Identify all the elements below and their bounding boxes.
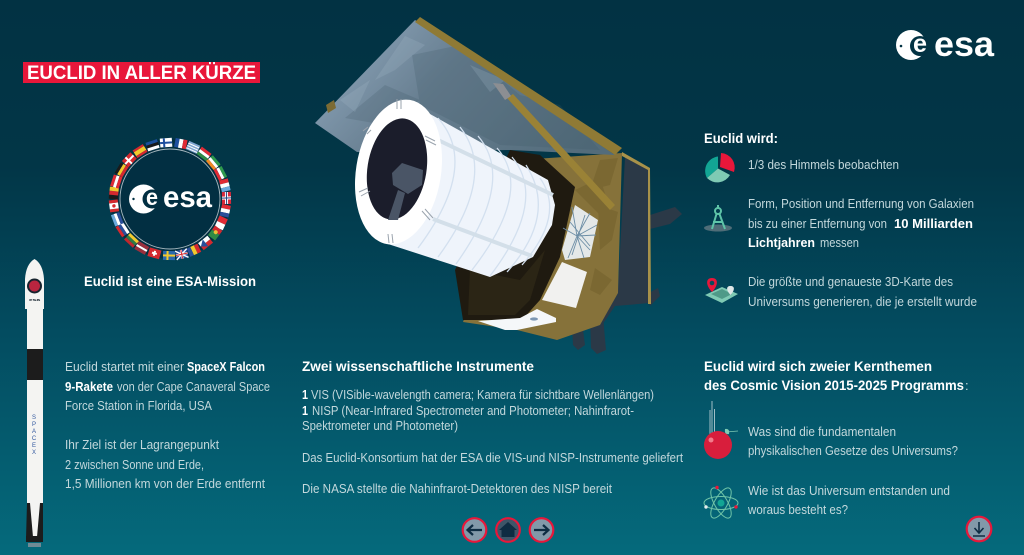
sky goal text: 1/3 des Himmels beobachten (748, 158, 899, 172)
instruments text block: NISP (Near-Infrared Spectrometer and Photometer; Nahinfrarot- (312, 404, 634, 418)
instruments text block: Das Euclid-Konsortium hat der ESA die VIS-und NISP-Instrumente geliefert (302, 451, 683, 465)
core themes heading (704, 358, 969, 393)
rocket: esa (29, 297, 41, 302)
launch text block: Ihr Ziel ist der Lagrangepunkt (65, 438, 219, 452)
rocket mission patch (27, 278, 42, 294)
icon: atom (704, 485, 738, 521)
badge esa logo: esa (163, 181, 212, 214)
rocket (25, 259, 44, 547)
esa flag ring badge (109, 138, 231, 260)
launch text block: SpaceX Falcon (187, 360, 265, 374)
launch text block: von der Cape Canaveral Space (117, 380, 270, 394)
badge esa logo: e (146, 184, 158, 210)
launch text block: 2 zwischen Sonne und Erde, (65, 458, 204, 472)
badge caption: Euclid ist eine ESA-Mission (84, 273, 256, 289)
rocket spacex label: A (32, 429, 36, 435)
button: back arrow (463, 518, 486, 542)
satellite dark side panel (590, 157, 650, 325)
distance goal text: Form, Position und Entfernung von Galaxien (748, 197, 974, 211)
icon: falling apple (704, 401, 738, 459)
instruments text block: 1 (302, 404, 308, 418)
core themes heading: : (965, 378, 969, 393)
core themes heading: Euclid wird sich zweier Kernthemen (704, 358, 932, 374)
distance goal text: 10 Milliarden (894, 217, 973, 231)
distance goal text: Lichtjahren (748, 236, 815, 250)
rocket spacex label: S (32, 415, 36, 421)
telescope aperture (345, 93, 452, 251)
icon: 3D map with pins (705, 278, 738, 303)
title: EUCLID IN ALLER KÜRZE (27, 63, 256, 84)
rocket spacex label: X (32, 450, 36, 456)
instruments text block: Zwei wissenschaftliche Instrumente (302, 358, 534, 374)
esa logo top right (896, 25, 995, 64)
button: forward arrow (530, 518, 553, 542)
origin question text: woraus besteht es? (747, 503, 848, 517)
rocket spacex label: E (32, 443, 36, 449)
goals heading: Euclid wird: (704, 130, 778, 146)
physics question text: physikalischen Gesetze des Universums? (748, 444, 958, 458)
map goal text: Universums generieren, die je erstellt wurde (748, 295, 977, 309)
instruments text block (302, 358, 683, 496)
launch text block (65, 360, 270, 491)
badge esa logo (129, 181, 212, 214)
launch text block: 9-Rakete (65, 380, 113, 394)
esa logo top right: e (913, 30, 927, 58)
satellite solar edge (622, 152, 651, 304)
distance goal text: bis zu einer Entfernung von (748, 217, 887, 231)
button: home (496, 518, 520, 542)
instruments text block: 1 (302, 388, 308, 402)
esa logo top right: esa (934, 25, 995, 64)
icon: sky pie chart (705, 153, 735, 182)
launch text block: Euclid startet mit einer (65, 360, 184, 374)
core themes heading: des Cosmic Vision 2015-2025 Programms (704, 377, 964, 393)
distance goal text (748, 197, 974, 250)
physics question text (748, 425, 958, 458)
instruments text block: Die NASA stellte die Nahinfrarot-Detektoren des NISP bereit (302, 482, 612, 496)
barrel struts (438, 140, 553, 195)
satellite white lower panels (562, 205, 598, 260)
distance goal text: messen (820, 236, 859, 250)
barrel ribs (418, 118, 550, 276)
satellite white barrel (388, 100, 555, 277)
rocket spacex label: P (32, 422, 36, 428)
satellite sunshield (315, 20, 615, 155)
origin question text: Wie ist das Universum entstanden und (748, 484, 950, 498)
map goal text (748, 275, 977, 309)
satellite gold strip (415, 17, 622, 155)
map goal text: Die größte und genaueste 3D-Karte des (748, 275, 953, 289)
launch text block: 1,5 Millionen km von der Erde entfernt (65, 477, 265, 491)
instruments text block: Spektrometer und Photometer) (302, 419, 458, 433)
satellite boom (507, 94, 615, 210)
ring of member flags (109, 138, 231, 260)
physics question text: Was sind die fundamentalen (748, 425, 896, 439)
satellite gold body (463, 153, 622, 340)
instruments text block: VIS (VISible-wavelength camera; Kamera für sichtbare Wellenlängen) (311, 388, 654, 402)
rocket spacex label (32, 415, 37, 456)
rocket spacex label: C (32, 436, 37, 442)
satellite illustration (315, 17, 682, 354)
button: download (967, 517, 991, 541)
icon: drawing compass (704, 205, 732, 232)
satellite rear legs (572, 207, 682, 354)
launch text block: Force Station in Florida, USA (65, 399, 213, 413)
satellite dark tube mount (455, 150, 575, 320)
origin question text (747, 484, 950, 517)
